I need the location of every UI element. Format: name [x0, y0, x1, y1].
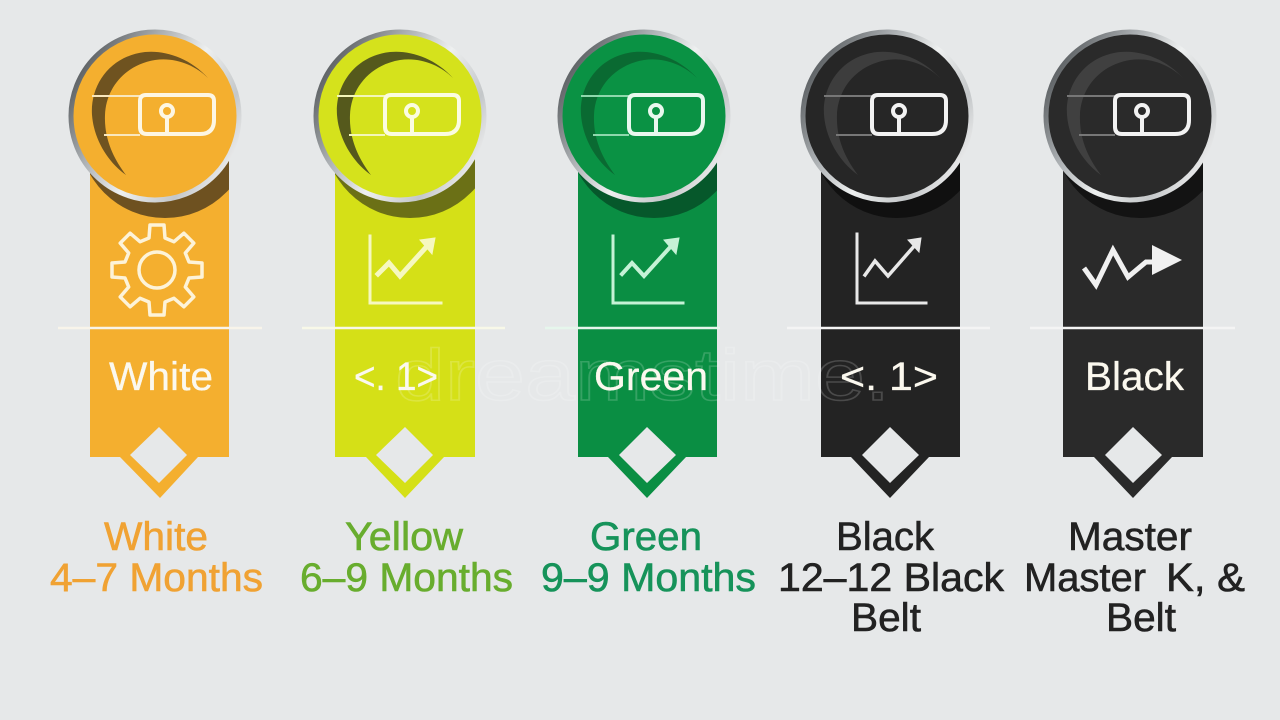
banner: black — [821, 150, 960, 498]
badge: master belt — [1046, 32, 1214, 200]
banner shadow under badge — [578, 162, 717, 218]
badge: black belt — [803, 32, 971, 200]
band label: <. 1> — [354, 355, 438, 399]
banner shadow under badge — [1064, 162, 1203, 218]
infographic canvas — [50, 30, 1245, 632]
caption: 12–12 Black — [778, 556, 1005, 600]
badge: yellow belt — [316, 32, 484, 200]
panel: black belt column — [778, 32, 1005, 640]
caption: Master — [1068, 515, 1192, 559]
banner: yellow — [335, 150, 475, 498]
diamond — [376, 427, 433, 483]
diamond — [1105, 427, 1162, 483]
panel: master belt column — [1024, 32, 1245, 640]
badge: orange belt — [71, 32, 239, 200]
panel: yellow belt column — [300, 32, 513, 600]
icon: gear — [112, 225, 202, 315]
panel: green belt column — [541, 32, 756, 600]
band label: Black — [1085, 355, 1185, 399]
icon: zigzag arrow — [1084, 245, 1182, 285]
caption: Black — [836, 515, 935, 559]
diamond — [619, 427, 676, 483]
watermark: dreamstime. — [395, 336, 890, 416]
banner shadow under badge — [821, 163, 960, 218]
band label: Green — [594, 355, 708, 399]
banner shadow under badge — [90, 161, 229, 218]
band label: White — [109, 355, 213, 399]
banner: orange — [90, 150, 229, 498]
caption: Yellow — [345, 515, 463, 559]
caption: 6–9 Months — [300, 556, 513, 600]
panel: white belt column — [50, 32, 263, 600]
caption: White — [104, 515, 208, 559]
caption: 4–7 Months — [50, 556, 263, 600]
caption: Green — [590, 515, 702, 559]
caption: Master — [1024, 556, 1146, 600]
icon: rising chart — [370, 236, 441, 303]
banner shadow under badge — [335, 159, 475, 218]
badge: green belt — [560, 32, 728, 200]
diamond — [862, 427, 919, 483]
banner: green — [578, 150, 717, 498]
icon: rising chart — [857, 234, 926, 303]
caption: Belt — [1106, 596, 1176, 640]
icon: rising chart — [613, 236, 683, 303]
banner: charcoal — [1063, 150, 1203, 498]
diamond — [130, 427, 187, 483]
caption: Belt — [851, 596, 921, 640]
caption: K, & — [1166, 556, 1245, 600]
caption: 9–9 Months — [541, 556, 756, 600]
band label: <. 1> — [840, 355, 938, 399]
